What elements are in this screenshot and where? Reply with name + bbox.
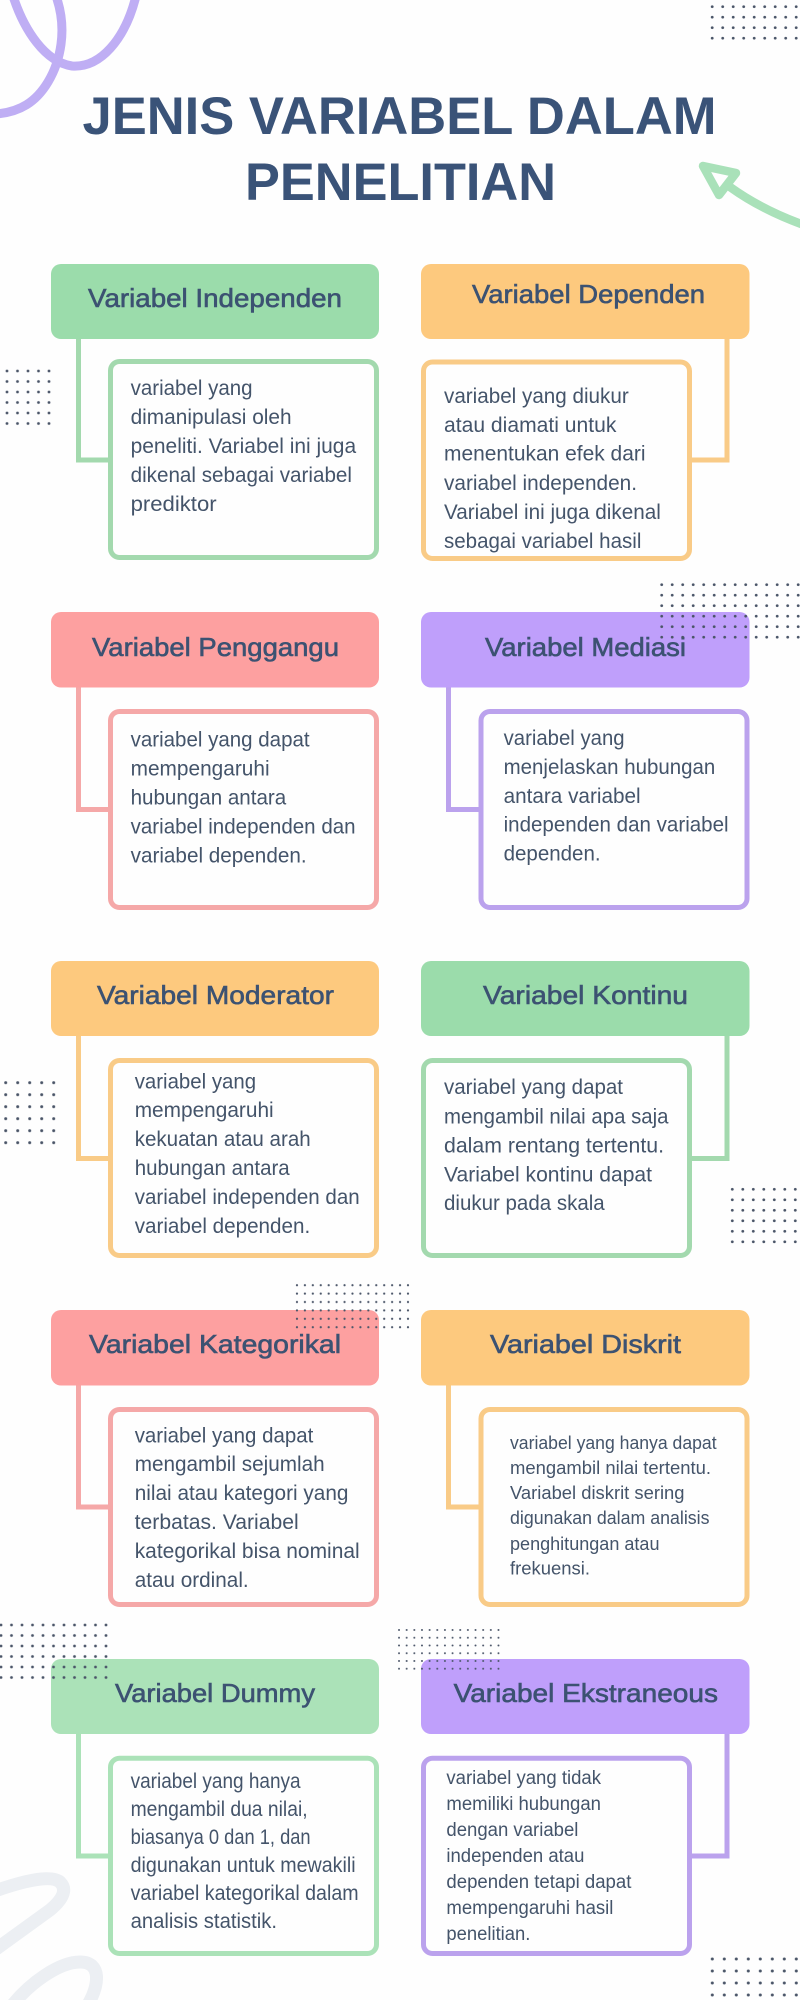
- text box: Variabel Independen: variabel yang: [131, 377, 253, 400]
- text box: Variabel Kategorikal: variabel yang dapat: [135, 1424, 313, 1447]
- text box: Variabel Diskrit: digunakan dalam analisis: [510, 1507, 710, 1528]
- text box: Variabel Dummy: digunakan untuk mewakili: [131, 1854, 356, 1877]
- text box: Variabel Moderator: kekuatan atau arah: [135, 1128, 311, 1151]
- text box: Variabel Mediasi: menjelaskan hubungan: [504, 756, 715, 779]
- text box: Variabel Penggangu: variabel yang dapat: [131, 728, 310, 752]
- text box: Variabel Ekstraneous: variabel yang tidak: [446, 1768, 601, 1789]
- text box: Variabel Dummy: biasanya 0 dan 1, dan: [131, 1826, 311, 1849]
- heading: Variabel Kategorikal: Variabel Kategorikal: [89, 1329, 341, 1359]
- heading: Variabel Kategorikal: [51, 1310, 379, 1386]
- text box: Variabel Dummy: [110, 1758, 376, 1954]
- text box: Variabel Dependen: sebagai variabel hasil: [444, 530, 641, 553]
- title: [82, 87, 716, 212]
- text box: Variabel Kategorikal: mengambil sejumlah: [135, 1453, 325, 1476]
- title: PENELITIAN: [245, 153, 556, 212]
- text box: Variabel Ekstraneous: dengan variabel: [446, 1820, 578, 1841]
- text box: Variabel Diskrit: penghitungan atau: [510, 1533, 660, 1554]
- text box: Variabel Diskrit: variabel yang hanya dapat: [510, 1432, 717, 1453]
- text box: Variabel Ekstraneous: independen atau: [446, 1846, 584, 1867]
- panel: Variabel Independen: [51, 264, 379, 558]
- panel: Variabel Penggangu: [51, 612, 379, 908]
- text box: Variabel Diskrit: [481, 1410, 747, 1604]
- panel: Variabel Kontinu: [421, 961, 750, 1256]
- heading: Variabel Ekstraneous: [421, 1659, 750, 1734]
- text box: Variabel Moderator: [110, 1060, 376, 1256]
- heading: Variabel Dummy: [51, 1659, 379, 1734]
- panel: Variabel Kategorikal: [51, 1310, 379, 1604]
- text box: Variabel Diskrit: mengambil nilai tertentu.: [510, 1457, 711, 1478]
- text box: Variabel Moderator: variabel dependen.: [135, 1215, 310, 1238]
- text box: Variabel Kontinu: [424, 1060, 690, 1256]
- decoration: green arrow: [703, 166, 800, 225]
- text box: Variabel Kategorikal: nilai atau kategori yang: [135, 1482, 348, 1505]
- text box: Variabel Dummy: mengambil dua nilai,: [131, 1798, 308, 1821]
- heading: Variabel Kontinu: [421, 961, 750, 1036]
- panel: Variabel Dependen: [421, 264, 750, 558]
- heading: Variabel Moderator: Variabel Moderator: [97, 980, 334, 1010]
- text box: Variabel Penggangu: variabel independen dan: [131, 816, 356, 838]
- text box: Variabel Independen: dimanipulasi oleh: [131, 406, 292, 429]
- text box: Variabel Kontinu: Variabel kontinu dapat: [444, 1163, 652, 1186]
- heading: Variabel Kontinu: Variabel Kontinu: [483, 980, 688, 1010]
- text box: Variabel Independen: prediktor: [131, 493, 217, 516]
- title: JENIS VARIABEL DALAM: [82, 87, 716, 146]
- panel: Variabel Moderator: [51, 961, 379, 1256]
- text box: Variabel Dependen: variabel independen.: [444, 472, 637, 495]
- text box: Variabel Ekstraneous: penelitian.: [446, 1924, 530, 1945]
- text box: Variabel Ekstraneous: memiliki hubungan: [446, 1794, 601, 1815]
- text box: Variabel Kategorikal: terbatas. Variabel: [135, 1511, 299, 1534]
- text box: Variabel Kategorikal: atau ordinal.: [135, 1569, 249, 1592]
- text box: Variabel Independen: peneliti. Variabel ini juga: [131, 435, 356, 458]
- text box: Variabel Penggangu: mempengaruhi: [131, 758, 270, 780]
- heading: Variabel Mediasi: [421, 612, 750, 688]
- text box: Variabel Ekstraneous: dependen tetapi dapat: [446, 1872, 632, 1893]
- text box: Variabel Moderator: variabel independen dan: [135, 1186, 360, 1209]
- heading: Variabel Independen: [51, 264, 379, 339]
- panel: Variabel Dummy: [51, 1659, 379, 1954]
- text box: Variabel Dependen: menentukan efek dari: [444, 443, 646, 466]
- text box: Variabel Kontinu: variabel yang dapat: [444, 1076, 623, 1099]
- panel: Variabel Mediasi: [421, 612, 750, 908]
- text box: Variabel Independen: [110, 362, 376, 558]
- text box: Variabel Kontinu: diukur pada skala: [444, 1192, 605, 1215]
- text box: Variabel Penggangu: hubungan antara: [131, 786, 287, 810]
- text box: Variabel Independen: dikenal sebagai variabel: [131, 464, 352, 487]
- text box: Variabel Moderator: variabel yang: [135, 1070, 256, 1094]
- heading: Variabel Dependen: [421, 264, 750, 339]
- text box: Variabel Kontinu: dalam rentang tertentu.: [444, 1134, 664, 1158]
- text box: Variabel Penggangu: variabel dependen.: [131, 844, 307, 868]
- text box: Variabel Dependen: Variabel ini juga dikenal: [444, 501, 661, 524]
- text box: Variabel Mediasi: [481, 712, 747, 908]
- text box: Variabel Dummy: analisis statistik.: [131, 1910, 277, 1933]
- text box: Variabel Dependen: [424, 362, 690, 558]
- text box: Variabel Dependen: variabel yang diukur: [444, 385, 629, 408]
- heading: Variabel Diskrit: [421, 1310, 750, 1386]
- decoration: grey loops: [0, 1879, 97, 2000]
- text box: Variabel Moderator: hubungan antara: [135, 1157, 290, 1180]
- text box: Variabel Mediasi: dependen.: [504, 843, 601, 866]
- text box: Variabel Mediasi: antara variabel: [504, 785, 641, 808]
- heading: Variabel Mediasi: Variabel Mediasi: [485, 632, 686, 662]
- heading: Variabel Ekstraneous: Variabel Ekstraneous: [454, 1678, 718, 1708]
- text box: Variabel Moderator: mempengaruhi: [135, 1099, 274, 1122]
- text box: Variabel Kategorikal: [110, 1410, 376, 1604]
- text box: Variabel Ekstraneous: mempengaruhi hasil: [446, 1898, 613, 1919]
- text box: Variabel Diskrit: Variabel diskrit sering: [510, 1482, 684, 1503]
- text box: Variabel Dummy: variabel kategorikal dalam: [131, 1882, 359, 1905]
- text box: Variabel Dependen: atau diamati untuk: [444, 414, 617, 437]
- heading: Variabel Penggangu: Variabel Penggangu: [92, 632, 339, 662]
- text box: Variabel Diskrit: frekuensi.: [510, 1558, 590, 1578]
- heading: Variabel Diskrit: Variabel Diskrit: [490, 1329, 682, 1359]
- text box: Variabel Kategorikal: kategorikal bisa nominal: [135, 1540, 360, 1563]
- heading: Variabel Moderator: [51, 961, 379, 1036]
- text box: Variabel Ekstraneous: [424, 1758, 690, 1954]
- heading: Variabel Independen: Variabel Independen: [88, 283, 342, 313]
- text box: Variabel Dummy: variabel yang hanya: [131, 1770, 301, 1793]
- text box: Variabel Mediasi: variabel yang: [504, 727, 625, 750]
- text box: Variabel Kontinu: mengambil nilai apa saja: [444, 1106, 669, 1128]
- text box: Variabel Mediasi: independen dan variabel: [504, 814, 729, 837]
- panel: Variabel Ekstraneous: [421, 1659, 750, 1954]
- heading: Variabel Dummy: Variabel Dummy: [115, 1678, 315, 1708]
- decoration: purple squiggle: [0, 0, 136, 114]
- heading: Variabel Penggangu: [51, 612, 379, 688]
- heading: Variabel Dependen: Variabel Dependen: [472, 279, 705, 309]
- panel: Variabel Diskrit: [421, 1310, 750, 1604]
- text box: Variabel Penggangu: [110, 712, 376, 908]
